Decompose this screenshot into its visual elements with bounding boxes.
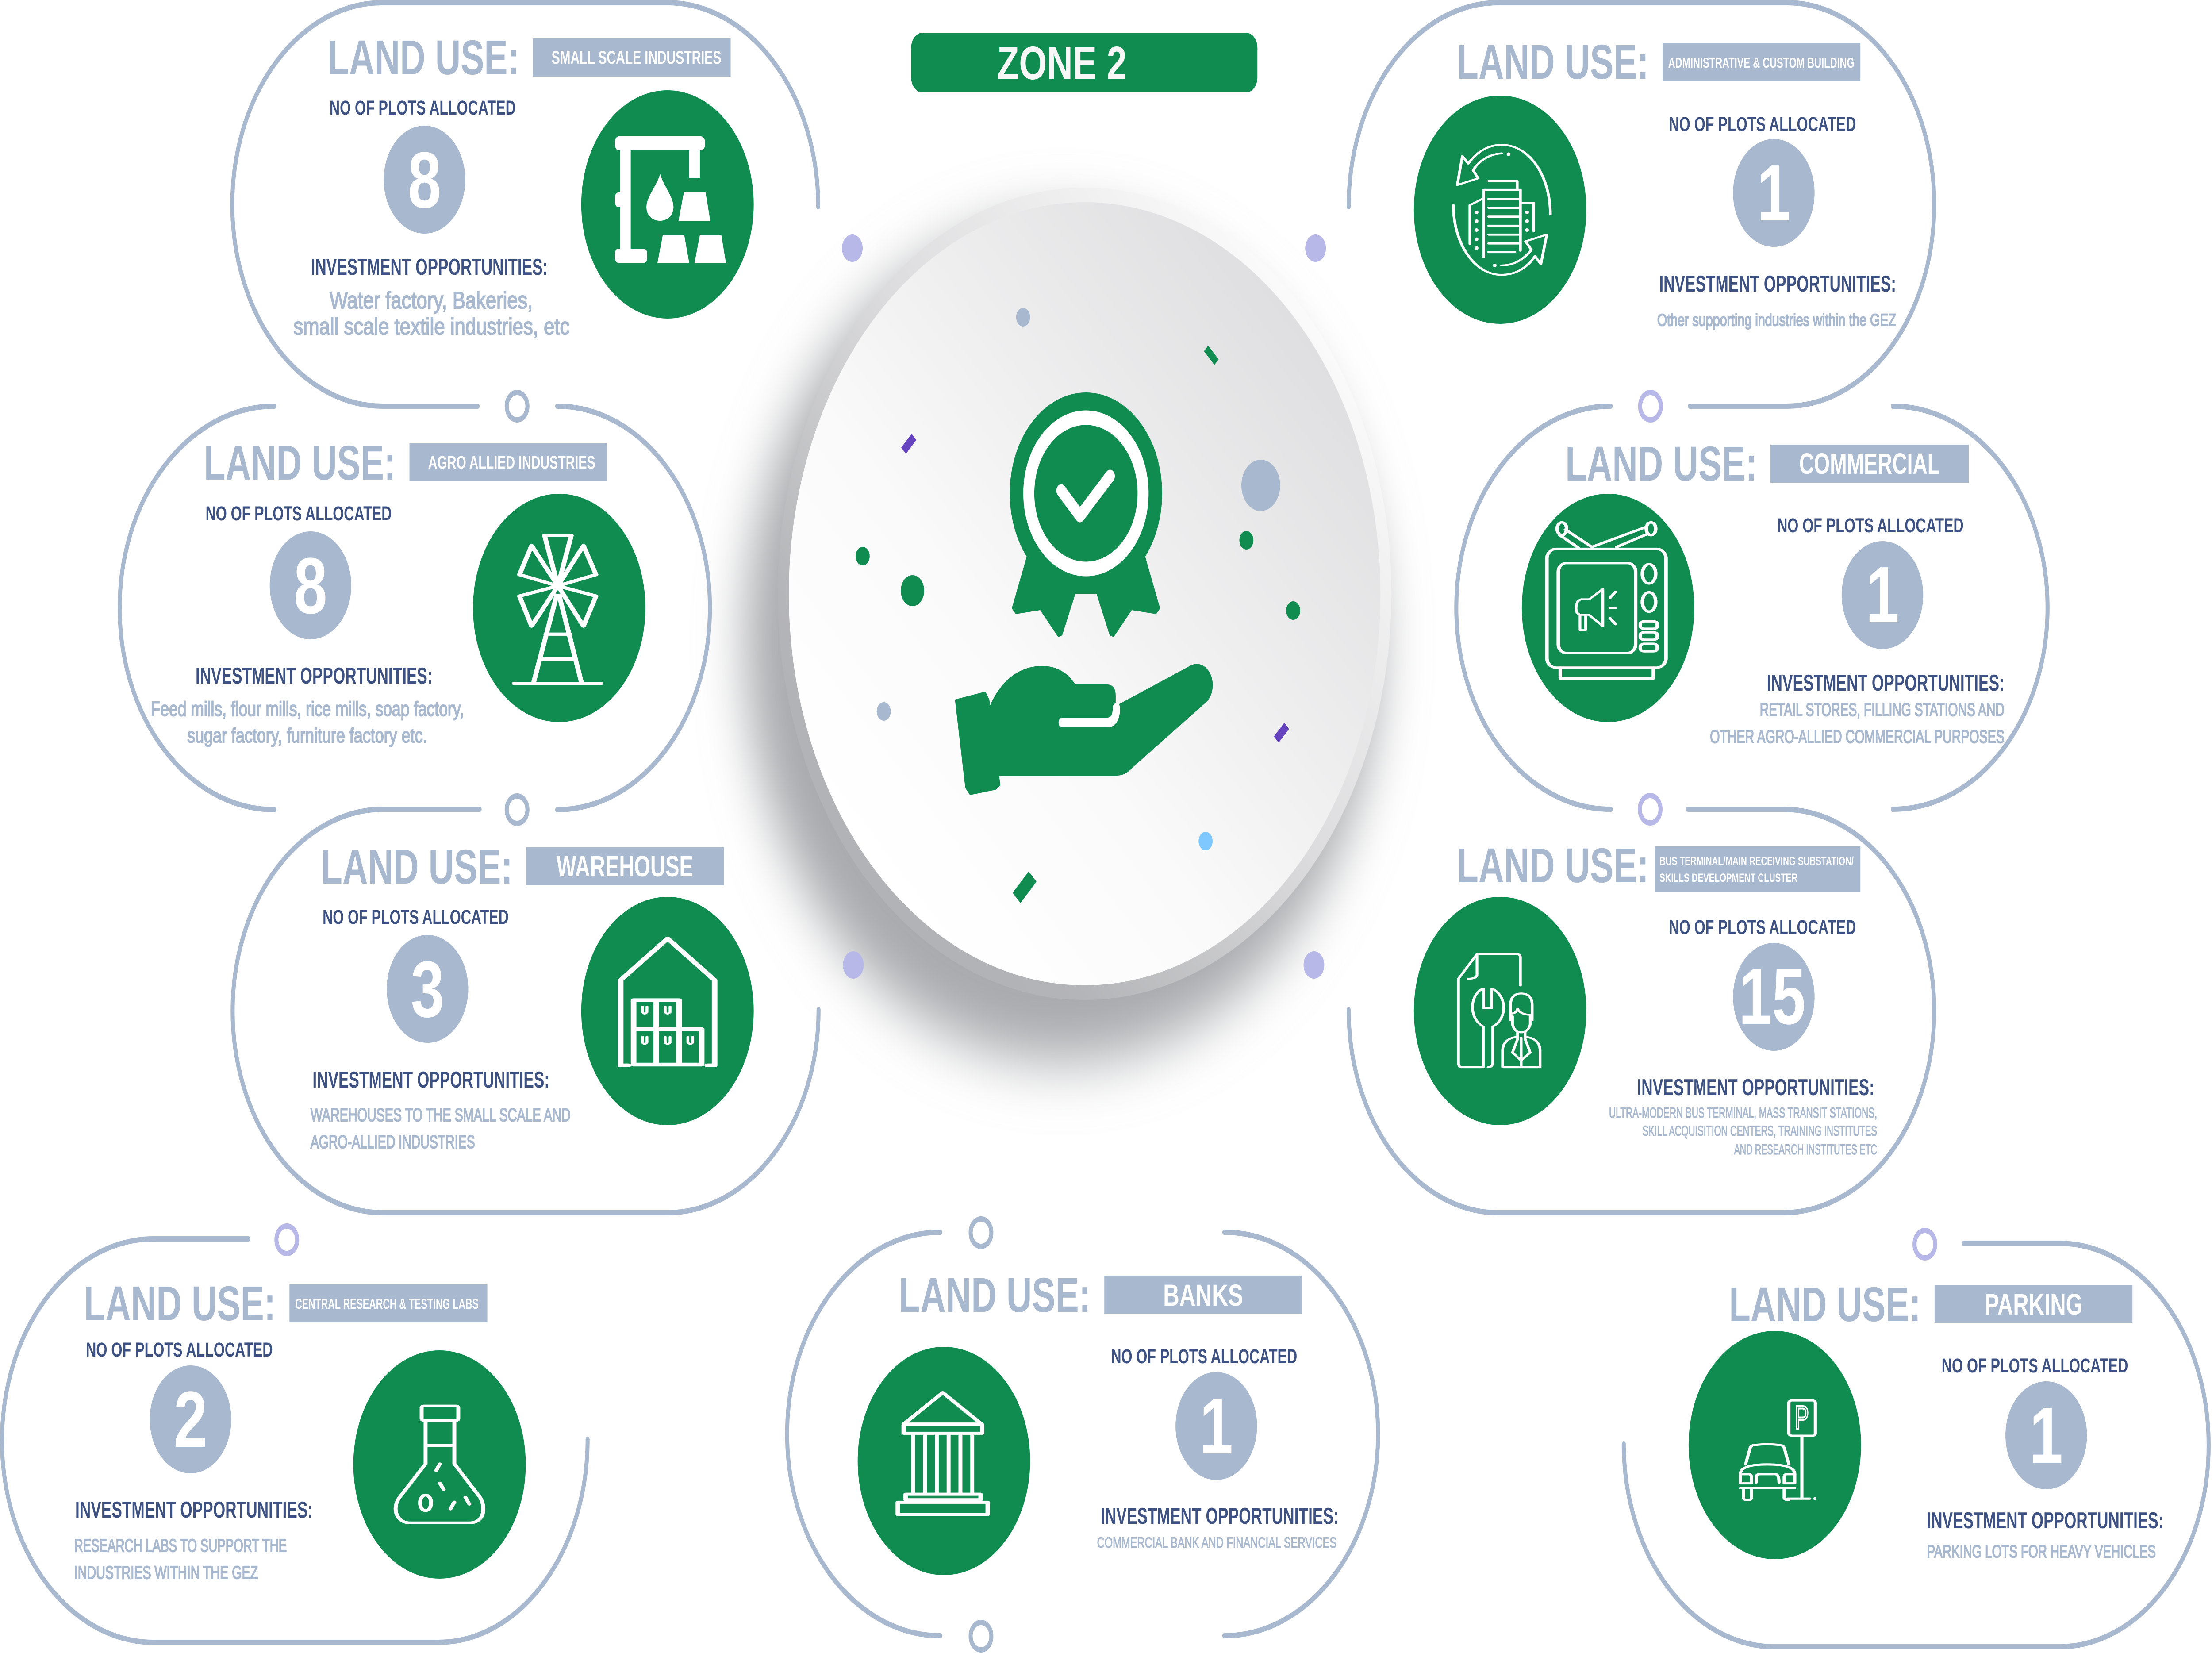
opportunities text bbox=[311, 1104, 571, 1152]
heading: LAND USE: bbox=[1729, 1277, 1921, 1332]
panel outline bbox=[2, 1239, 588, 1642]
opportunities text: sugar factory, furniture factory etc. bbox=[187, 724, 427, 747]
icon: parked car and sign bbox=[1689, 1331, 1861, 1559]
plots count: 8 bbox=[294, 542, 327, 630]
land use tag: ADMINISTRATIVE & CUSTOM BUILDING bbox=[1668, 55, 1855, 71]
plots count: 1 bbox=[1757, 149, 1790, 237]
land use tag: WAREHOUSE bbox=[557, 850, 693, 883]
land use tag bbox=[1663, 43, 1860, 81]
opportunities text: AGRO-ALLIED INDUSTRIES bbox=[311, 1131, 475, 1152]
icon: parked car and sign: P bbox=[1795, 1399, 1809, 1436]
confetti dots bbox=[856, 308, 1300, 903]
panel outline bbox=[1349, 3, 1934, 406]
opportunities text: Water factory, Bakeries, bbox=[330, 288, 533, 314]
icon: television with megaphone bbox=[1522, 494, 1694, 722]
opportunities label: INVESTMENT OPPORTUNITIES: bbox=[312, 1067, 549, 1092]
plots count: 15 bbox=[1739, 952, 1805, 1041]
panel: small scale industries bbox=[232, 3, 818, 406]
land use tag: SKILLS DEVELOPMENT CLUSTER bbox=[1659, 871, 1797, 885]
land use tag: SMALL SCALE INDUSTRIES bbox=[552, 47, 721, 68]
plots count bbox=[2005, 1381, 2087, 1489]
panel outline bbox=[119, 406, 710, 810]
land use tag: CENTRAL RESEARCH & TESTING LABS bbox=[295, 1296, 479, 1312]
opportunities label: INVESTMENT OPPORTUNITIES: bbox=[196, 663, 433, 688]
panel outline bbox=[1624, 1243, 2208, 1647]
plots count bbox=[270, 531, 351, 639]
icon: document, wrench and engineer bbox=[1414, 897, 1586, 1125]
panel outline bbox=[233, 809, 818, 1213]
heading: LAND USE: bbox=[1457, 838, 1649, 893]
opportunities text bbox=[1710, 699, 2005, 747]
opportunities label: INVESTMENT OPPORTUNITIES: bbox=[1767, 670, 2005, 696]
plots count bbox=[1842, 541, 1923, 649]
panel: warehouse bbox=[233, 809, 818, 1213]
icon: bank building bbox=[858, 1347, 1030, 1575]
connector dots around disk bbox=[842, 234, 1326, 979]
land use tag bbox=[1770, 445, 1969, 483]
opportunities text: PARKING LOTS FOR HEAVY VEHICLES bbox=[1927, 1542, 2156, 1561]
opportunities label: INVESTMENT OPPORTUNITIES: bbox=[1927, 1507, 2163, 1533]
plots label: NO OF PLOTS ALLOCATED bbox=[330, 97, 516, 119]
heading: LAND USE: bbox=[327, 31, 519, 85]
plots count bbox=[1175, 1372, 1257, 1480]
land use tag: AGRO ALLIED INDUSTRIES bbox=[428, 452, 595, 473]
land use tag bbox=[1655, 846, 1860, 892]
panel: commercial bbox=[1456, 406, 2047, 809]
land use tag bbox=[1104, 1276, 1302, 1314]
icon: warehouse bbox=[581, 897, 754, 1125]
heading: LAND USE: bbox=[1565, 437, 1757, 491]
opportunities text: WAREHOUSES TO THE SMALL SCALE AND bbox=[311, 1104, 571, 1125]
icon: windmill bbox=[473, 494, 645, 722]
panel: central research and testing labs bbox=[2, 1239, 588, 1642]
land use tag: COMMERCIAL bbox=[1799, 447, 1940, 481]
opportunities label: INVESTMENT OPPORTUNITIES: bbox=[1637, 1074, 1874, 1100]
opportunities label: INVESTMENT OPPORTUNITIES: bbox=[1101, 1503, 1339, 1529]
opportunities label: INVESTMENT OPPORTUNITIES: bbox=[311, 254, 548, 280]
heading: LAND USE: bbox=[1457, 35, 1649, 89]
plots label: NO OF PLOTS ALLOCATED bbox=[1111, 1346, 1297, 1368]
opportunities text: RETAIL STORES, FILLING STATIONS AND bbox=[1760, 699, 2005, 720]
opportunities text bbox=[1609, 1105, 1877, 1158]
heading: LAND USE: bbox=[84, 1276, 276, 1331]
plots label: NO OF PLOTS ALLOCATED bbox=[1942, 1355, 2128, 1377]
opportunities text: Feed mills, flour mills, rice mills, soap factory, bbox=[151, 697, 464, 720]
plots count: 1 bbox=[2029, 1391, 2063, 1480]
plots count: 3 bbox=[411, 945, 444, 1034]
opportunities label: INVESTMENT OPPORTUNITIES: bbox=[1659, 271, 1896, 296]
icon: laboratory flask bbox=[353, 1350, 526, 1579]
land use tag: BANKS bbox=[1163, 1278, 1243, 1312]
plots label: NO OF PLOTS ALLOCATED bbox=[86, 1339, 273, 1361]
panel outline bbox=[1456, 406, 2047, 809]
opportunities text: ULTRA-MODERN BUS TERMINAL, MASS TRANSIT STATIONS, bbox=[1609, 1105, 1877, 1121]
land use tag: BUS TERMINAL/MAIN RECEIVING SUBSTATION/ bbox=[1659, 854, 1854, 868]
plots count bbox=[384, 126, 465, 234]
central disk shadow bbox=[745, 221, 1380, 1062]
panel: bus terminal and skills cluster bbox=[1349, 809, 1934, 1213]
panel: agro allied industries bbox=[119, 406, 710, 810]
land use tag: PARKING bbox=[1985, 1288, 2083, 1321]
land use tag bbox=[1935, 1285, 2132, 1323]
opportunities text: AND RESEARCH INSTITUTES ETC bbox=[1734, 1142, 1877, 1158]
panel outline bbox=[1349, 809, 1934, 1213]
plots count bbox=[1733, 139, 1815, 247]
panel outline bbox=[787, 1232, 1378, 1636]
plots count: 8 bbox=[408, 136, 441, 224]
opportunities text: RESEARCH LABS TO SUPPORT THE bbox=[74, 1535, 287, 1556]
icon: buildings with cycle arrows bbox=[1414, 96, 1586, 324]
plots count bbox=[1733, 943, 1815, 1051]
plots count bbox=[150, 1365, 231, 1473]
land use tag bbox=[533, 38, 731, 77]
panel: parking bbox=[1624, 1243, 2208, 1647]
opportunities text: OTHER AGRO-ALLIED COMMERCIAL PURPOSES bbox=[1710, 726, 2005, 747]
heading: LAND USE: bbox=[321, 840, 513, 894]
icon: open hand bbox=[955, 664, 1213, 795]
connector rings bbox=[276, 392, 1935, 1650]
opportunities text bbox=[293, 288, 569, 340]
plots count: 1 bbox=[1200, 1382, 1233, 1470]
plots label: NO OF PLOTS ALLOCATED bbox=[323, 907, 509, 928]
disk outer ring bbox=[778, 188, 1391, 1000]
panel: administrative and custom building bbox=[1349, 3, 1934, 406]
plots label: NO OF PLOTS ALLOCATED bbox=[1777, 515, 1964, 537]
panel: central disk with award icon bbox=[778, 188, 1391, 1000]
icon: small industry bbox=[581, 90, 754, 319]
heading: LAND USE: bbox=[204, 436, 396, 490]
land use tag bbox=[526, 847, 724, 885]
opportunities text: INDUSTRIES WITHIN THE GEZ bbox=[74, 1562, 258, 1583]
land use tag bbox=[289, 1284, 488, 1322]
title: ZONE 2 bbox=[911, 33, 1257, 92]
opportunities text: SKILL ACQUISITION CENTERS, TRAINING INSTITUTES bbox=[1643, 1123, 1877, 1139]
plots count bbox=[387, 935, 468, 1043]
panel: banks bbox=[787, 1232, 1378, 1636]
opportunities label: INVESTMENT OPPORTUNITIES: bbox=[75, 1497, 313, 1522]
plots count: 2 bbox=[174, 1375, 207, 1464]
disk face bbox=[789, 202, 1380, 985]
opportunities text: Other supporting industries within the GEZ bbox=[1657, 311, 1896, 330]
opportunities text bbox=[151, 697, 464, 747]
icon: medal ribbon and badge bbox=[1010, 392, 1162, 637]
plots label: NO OF PLOTS ALLOCATED bbox=[1669, 917, 1856, 938]
plots label: NO OF PLOTS ALLOCATED bbox=[206, 503, 392, 525]
opportunities text: small scale textile industries, etc bbox=[293, 314, 569, 340]
title: ZONE 2: ZONE 2 bbox=[997, 37, 1127, 89]
land use tag bbox=[410, 443, 607, 481]
heading: LAND USE: bbox=[899, 1268, 1091, 1322]
plots label: NO OF PLOTS ALLOCATED bbox=[1669, 114, 1856, 135]
opportunities text: COMMERCIAL BANK AND FINANCIAL SERVICES bbox=[1097, 1535, 1336, 1551]
opportunities text bbox=[74, 1535, 287, 1583]
panel outline bbox=[232, 3, 818, 406]
plots count: 1 bbox=[1866, 550, 1899, 639]
